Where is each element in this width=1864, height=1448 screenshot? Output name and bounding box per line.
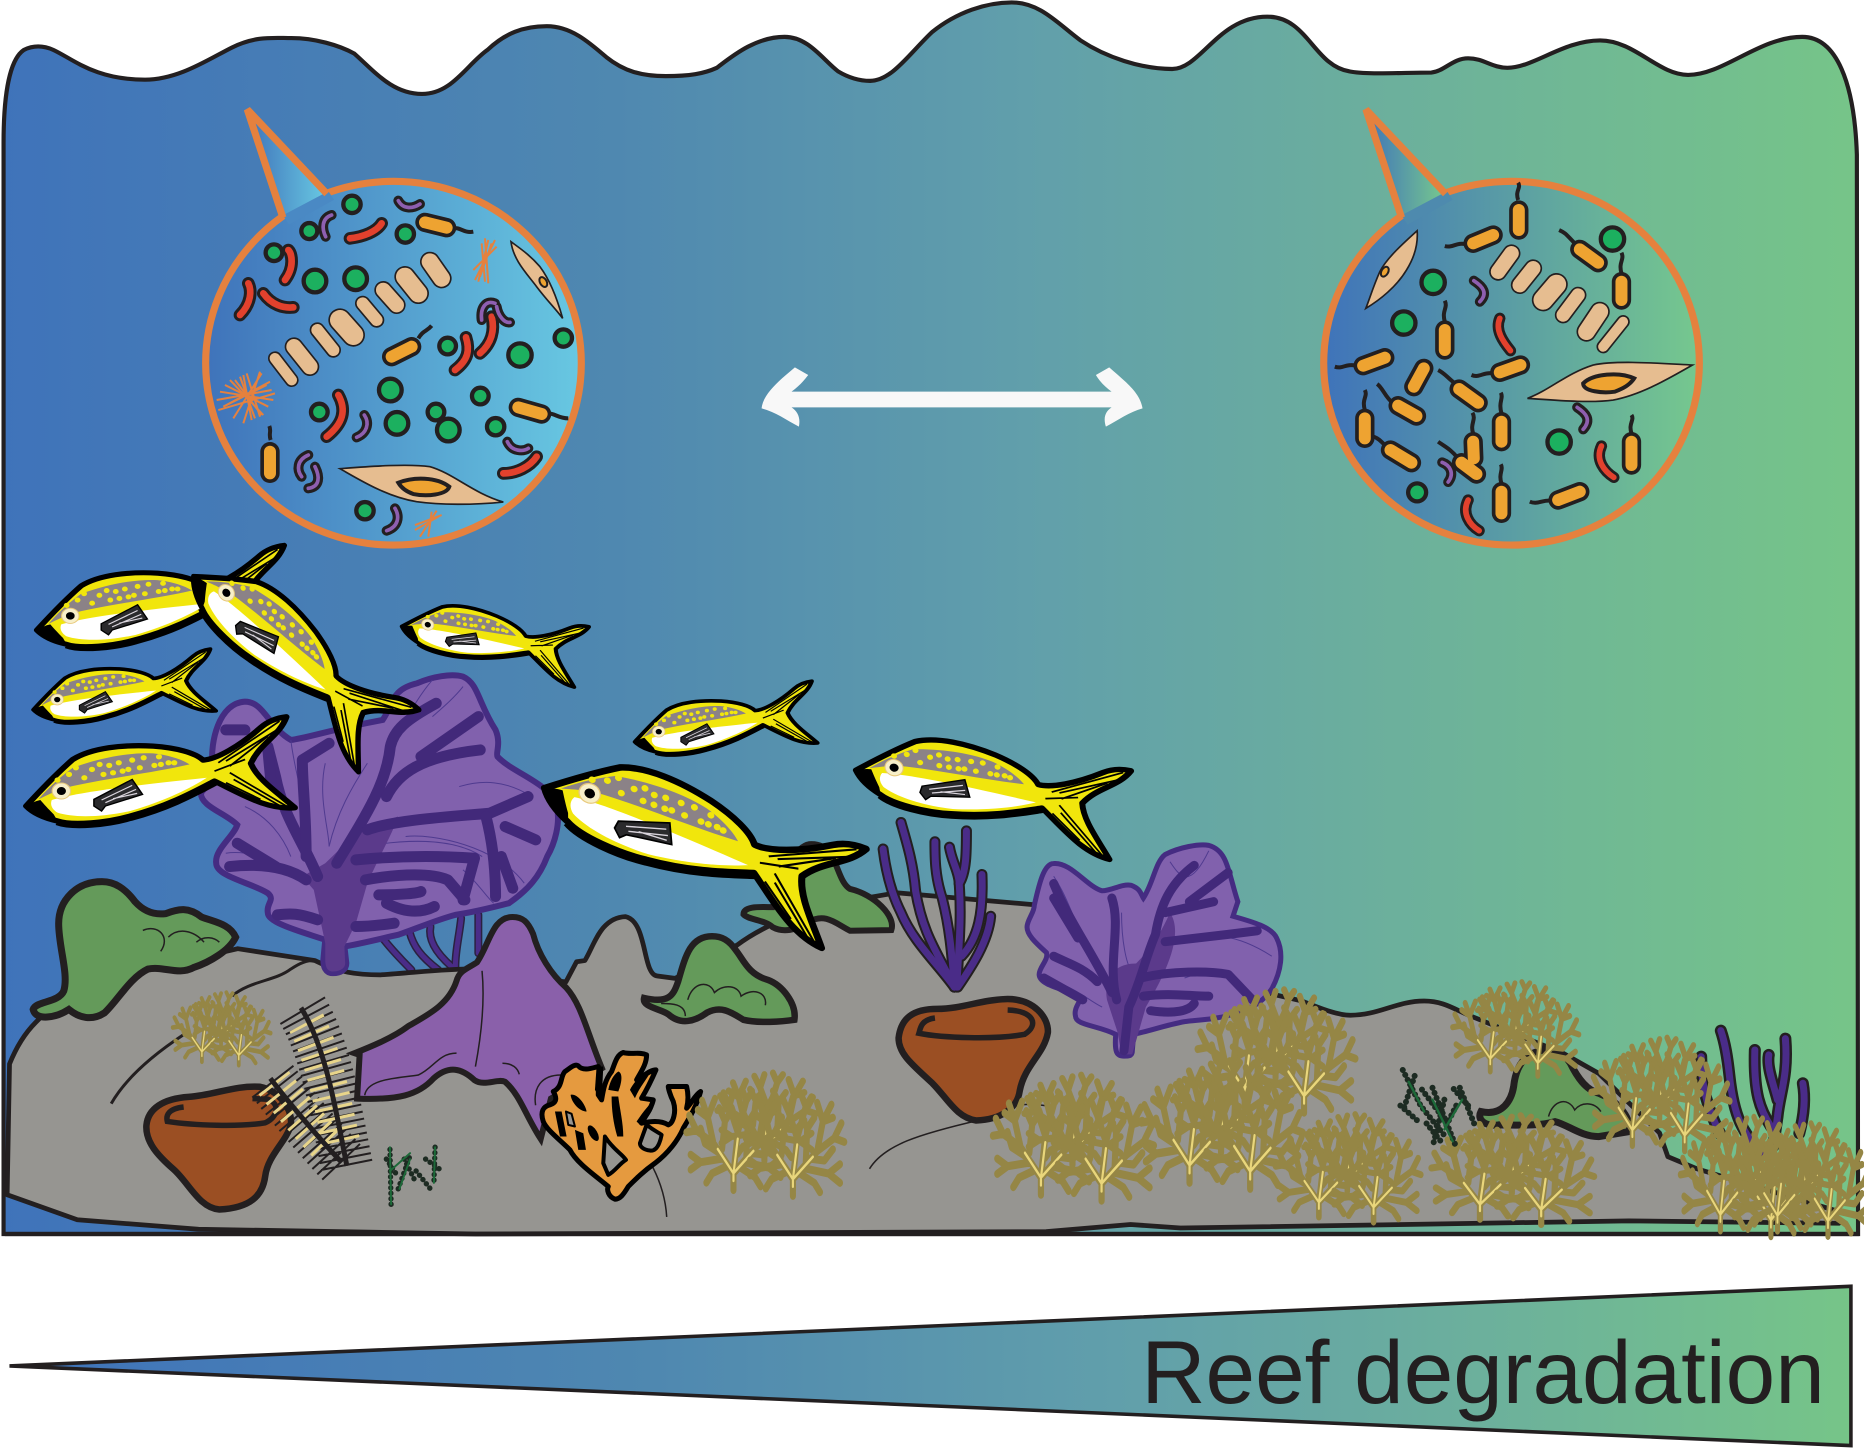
seaweed 1: [173, 992, 271, 1065]
right pot body: [899, 999, 1048, 1120]
fish right: [850, 686, 1139, 875]
green sponge right: [1480, 1050, 1629, 1137]
pointer opening mask: [282, 189, 334, 225]
right pointer edges: [1366, 109, 1446, 218]
fibroblast spindle: [511, 242, 563, 318]
feather stems: [270, 1008, 347, 1166]
fish small middle: [635, 681, 818, 754]
orange rods right: [1363, 210, 1631, 513]
reef degradation wedge: [10, 1286, 1851, 1446]
orange branching coral: [542, 1053, 701, 1199]
microbial bubble: healthy reef: [206, 109, 581, 545]
black feather coral: [270, 1008, 347, 1166]
feather barbs dark: [270, 1008, 347, 1166]
seaweed 6: [1276, 1114, 1421, 1222]
wedge label: Reef degradation: [1141, 1322, 1825, 1422]
right pointer fill: [1366, 109, 1444, 215]
fish diving: [181, 522, 424, 782]
seaweed 7: [1453, 982, 1579, 1076]
right fan blade: [1027, 845, 1281, 1056]
coral black holes: [555, 1067, 655, 1150]
bottom edge: [5, 1232, 1859, 1236]
red curved bacteria: [240, 223, 537, 473]
cone body: [355, 917, 602, 1139]
tan chain of cells: [275, 262, 442, 380]
arrow: white double-headed: [762, 367, 1143, 427]
red bacteria right: [1466, 318, 1614, 531]
reef rock: [7, 893, 1839, 1234]
coral grey gaps: [566, 1112, 662, 1175]
right sponge texture: [1549, 1102, 1601, 1117]
green sponge left: [33, 882, 236, 1018]
purple weed behind large coral: [383, 915, 478, 970]
flagella: [1335, 183, 1632, 503]
sea fan trunk: [302, 817, 398, 972]
fish small upper: [398, 569, 594, 697]
bubble pointer right: [1366, 109, 1453, 225]
fish large middle: [534, 696, 875, 965]
tan cell chain right: [1498, 253, 1623, 347]
right fan trunk: [1106, 913, 1175, 1054]
flagellated rods: [269, 222, 568, 473]
microbes: [217, 196, 572, 537]
bubble circle right: [1324, 181, 1699, 545]
seaweed 9: [1431, 1115, 1594, 1224]
dark green weed left: [386, 1147, 442, 1204]
sea fan blade: [201, 675, 558, 973]
cone folds: [365, 971, 561, 1105]
large spindle cell right: [1527, 362, 1692, 401]
right fan veins: [1054, 851, 1272, 1007]
purple spirilla right: [1442, 281, 1587, 482]
microbial bubble: degraded reef: [1324, 109, 1699, 545]
large purple sea fan: [201, 675, 558, 973]
fish upper left: [37, 545, 292, 647]
right pointer opening mask: [1400, 189, 1453, 225]
rock crevice lines: [111, 960, 667, 1217]
seaweed 10: [1680, 1117, 1815, 1236]
seaweed 8: [1591, 1038, 1730, 1151]
fibroblast spindle right: [1366, 231, 1417, 308]
pointer fill: [247, 109, 326, 215]
central purple weed: [883, 822, 991, 987]
large spindle cell: [340, 465, 503, 504]
purple cone sponge: [355, 917, 602, 1139]
bubble pointer: [247, 109, 334, 225]
right pot rim: [919, 1010, 1033, 1038]
green cocci: [266, 196, 572, 519]
seaweed 2: [686, 1073, 844, 1196]
seaweed 11: [1737, 1123, 1864, 1236]
right sponge body: [1480, 1050, 1629, 1137]
fish lower left: [26, 717, 295, 824]
orange filaments: [217, 238, 497, 537]
green sponge middle front: [644, 936, 795, 1022]
bubble circle: [206, 181, 581, 545]
sponge texture: [143, 929, 219, 951]
sea fan veins: [226, 680, 532, 903]
pointer edges: [247, 109, 327, 218]
crevice line: [870, 1104, 1054, 1169]
purple spirilla: [298, 201, 528, 531]
pot rim: [167, 1099, 276, 1125]
brown pot sponge right: [870, 999, 1054, 1169]
sea fan branches: [226, 703, 536, 927]
green cocci right: [1392, 227, 1624, 501]
seaweed 5: [1142, 1061, 1303, 1189]
sponge body: [33, 882, 236, 1018]
sponge front texture: [661, 984, 766, 1016]
sponge front body: [644, 936, 795, 1022]
gradient wedge: [10, 1286, 1851, 1446]
coral body: [542, 1053, 701, 1199]
dark green weed right: [1400, 1070, 1474, 1147]
microbes right: [1335, 183, 1692, 531]
seaweed 3: [993, 1075, 1154, 1201]
brown pot sponge left: [146, 1087, 291, 1210]
fish school: [26, 522, 1139, 965]
pot body: [146, 1087, 291, 1210]
seaweed clumps: [173, 982, 1864, 1236]
right purple sea fan: [1027, 845, 1281, 1056]
right purple weed: [1701, 1031, 1804, 1153]
fish small left: [33, 649, 216, 722]
right fan branches: [1044, 865, 1257, 1051]
green sponge middle back: [744, 844, 892, 931]
seaweed 4: [1198, 990, 1355, 1113]
feather barbs cream: [273, 1018, 343, 1149]
